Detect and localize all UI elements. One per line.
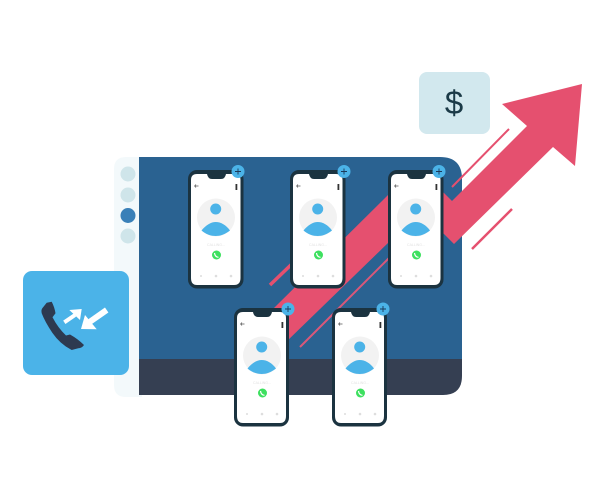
phone 1 — [188, 165, 244, 288]
icon: dollar card: $ — [445, 84, 463, 121]
add badge — [282, 302, 294, 316]
phone 4 — [234, 302, 294, 426]
add badge — [376, 302, 390, 316]
add badge — [338, 165, 350, 178]
panel: dashboard screen — [139, 157, 462, 395]
phone 5: CALLING... — [351, 381, 369, 385]
phone 1: CALLING... — [207, 243, 225, 247]
icon: dollar card — [419, 72, 490, 134]
phone 4: CALLING... — [253, 381, 271, 385]
phone 2 — [290, 165, 350, 288]
add badge — [232, 165, 244, 178]
phone 2: CALLING... — [309, 243, 327, 247]
phone 3 — [388, 165, 446, 288]
phone 5 — [332, 302, 390, 426]
arrow: rising trend — [262, 84, 582, 347]
phone 3: CALLING... — [407, 243, 425, 247]
add badge — [432, 165, 446, 178]
panel: sidebar — [114, 157, 142, 397]
icon: incoming and outgoing calls card — [23, 271, 129, 375]
